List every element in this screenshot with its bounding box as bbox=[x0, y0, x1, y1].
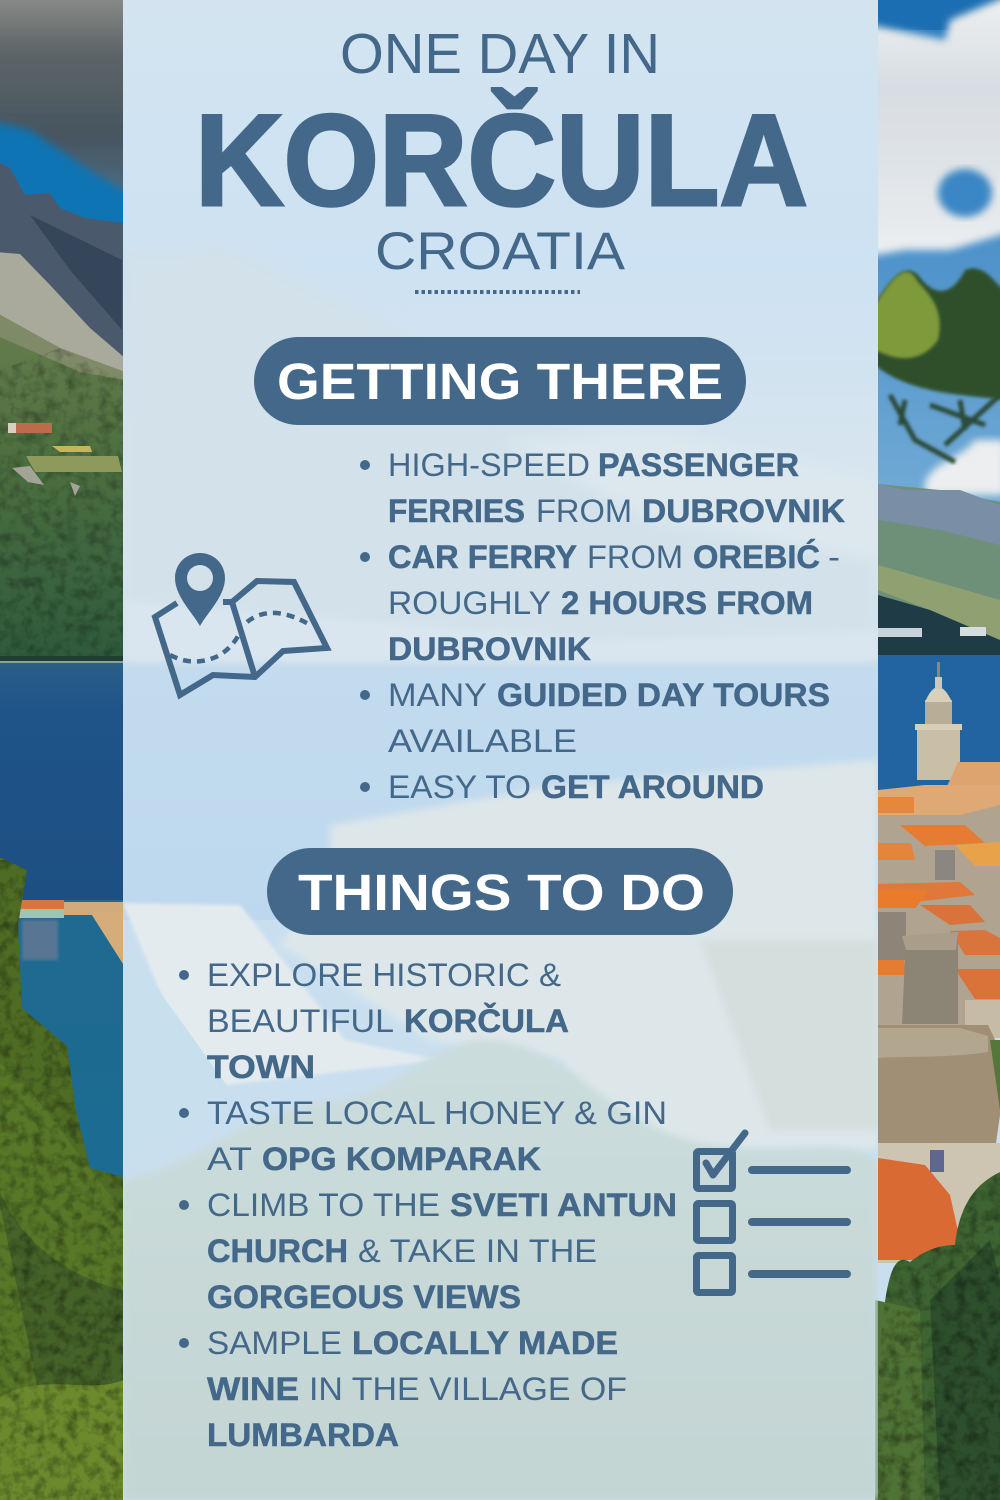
list: getting there: AVAILABLE bbox=[388, 723, 577, 759]
list: getting there: FERRIES bbox=[388, 493, 525, 529]
list: getting there: FROM bbox=[536, 493, 632, 529]
houses bbox=[878, 785, 1000, 1263]
round tower bbox=[902, 936, 958, 1024]
sea left bbox=[0, 663, 123, 903]
list: getting there: HIGH-SPEED bbox=[388, 447, 590, 483]
sea right bbox=[878, 655, 1000, 805]
foreground tree bbox=[0, 855, 123, 1500]
list: getting there: FROM bbox=[587, 539, 683, 575]
title line: one day in: ONE DAY IN bbox=[340, 22, 660, 86]
faded quay bbox=[123, 903, 440, 1088]
list: getting there: DUBROVNIK bbox=[388, 631, 591, 667]
pine lower branches bbox=[890, 395, 1000, 462]
hillside texture bbox=[0, 340, 123, 656]
list: things to do: TOWN bbox=[207, 1049, 315, 1085]
list: getting there: GET AROUND bbox=[541, 769, 764, 805]
white cloud bbox=[870, 0, 1000, 256]
list: getting there: PASSENGER bbox=[598, 447, 799, 483]
list: things to do: & TAKE IN THE bbox=[358, 1233, 597, 1269]
icon: map with pin bbox=[155, 553, 327, 695]
heading pill: things to do: THINGS TO DO bbox=[298, 864, 705, 921]
cathedral bbox=[915, 662, 1000, 800]
pine tree bbox=[875, 268, 1000, 462]
subtitle: Croatia: CROATIA bbox=[375, 222, 626, 281]
list: getting there: 2 HOURS FROM bbox=[561, 585, 813, 621]
right bottom trees bbox=[875, 1170, 1000, 1500]
heading pill: things to do bbox=[267, 848, 733, 935]
lower road and roofs bbox=[878, 1143, 1000, 1263]
list: things to do: WINE bbox=[207, 1371, 299, 1407]
list: things to do: BEAUTIFUL bbox=[207, 1003, 394, 1039]
rocky slope bbox=[0, 252, 125, 372]
list: getting there: MANY bbox=[388, 677, 487, 713]
list: things to do: AT bbox=[207, 1141, 252, 1177]
green hillside bbox=[0, 300, 130, 662]
list: things to do: TASTE LOCAL HONEY & GIN bbox=[207, 1095, 667, 1131]
farm buildings and fields bbox=[10, 423, 52, 433]
mountains bbox=[878, 484, 1000, 662]
list: things to do: LUMBARDA bbox=[207, 1417, 399, 1453]
list: things to do bbox=[179, 957, 677, 1453]
title: Korčula: KORČULA bbox=[195, 87, 808, 233]
background photo: right strip bbox=[870, 0, 1000, 1500]
list: things to do: IN THE VILLAGE OF bbox=[309, 1371, 627, 1407]
bastion bbox=[878, 1025, 1000, 1143]
title block bbox=[195, 22, 808, 281]
list: getting there: EASY TO bbox=[388, 769, 531, 805]
heading pill: getting there bbox=[254, 337, 746, 425]
list: things to do: SVETI ANTUN bbox=[450, 1187, 677, 1223]
shoreline bbox=[0, 656, 123, 661]
translucent panel bbox=[123, 0, 878, 1500]
gap of blue sky in cloud bbox=[938, 169, 992, 217]
icon: checklist bbox=[696, 1133, 847, 1292]
list: things to do: KORČULA bbox=[404, 1003, 569, 1039]
list: getting there: - bbox=[828, 539, 840, 575]
list: things to do: GORGEOUS VIEWS bbox=[207, 1279, 521, 1315]
heading pill: getting there: GETTING THERE bbox=[277, 353, 723, 410]
dotted divider bbox=[415, 290, 580, 294]
list: things to do: SAMPLE bbox=[207, 1325, 342, 1361]
background photo: left strip bbox=[0, 0, 123, 1500]
pier and boat bbox=[6, 900, 123, 964]
list: things to do: OPG KOMPARAK bbox=[262, 1141, 541, 1177]
panel: things to do bbox=[179, 848, 847, 1453]
list: getting there: GUIDED DAY TOURS bbox=[497, 677, 830, 713]
list: things to do: LOCALLY MADE bbox=[352, 1325, 618, 1361]
list: things to do: CLIMB TO THE bbox=[207, 1187, 440, 1223]
dark storm cloud bbox=[0, 0, 140, 190]
list: getting there: ROUGHLY bbox=[388, 585, 551, 621]
panel: getting there bbox=[155, 337, 845, 805]
faded trees bbox=[123, 1040, 878, 1500]
list: getting there bbox=[360, 447, 845, 805]
list: things to do: CHURCH bbox=[207, 1233, 348, 1269]
list: getting there: OREBIĆ bbox=[693, 539, 820, 575]
far mountain bbox=[0, 160, 130, 400]
list: getting there: CAR FERRY bbox=[388, 539, 577, 575]
list: things to do: EXPLORE HISTORIC & bbox=[207, 957, 561, 993]
faded hills bbox=[135, 256, 315, 304]
list: getting there: DUBROVNIK bbox=[642, 493, 845, 529]
faded town bbox=[280, 760, 878, 1150]
low cloud bbox=[925, 440, 1000, 495]
